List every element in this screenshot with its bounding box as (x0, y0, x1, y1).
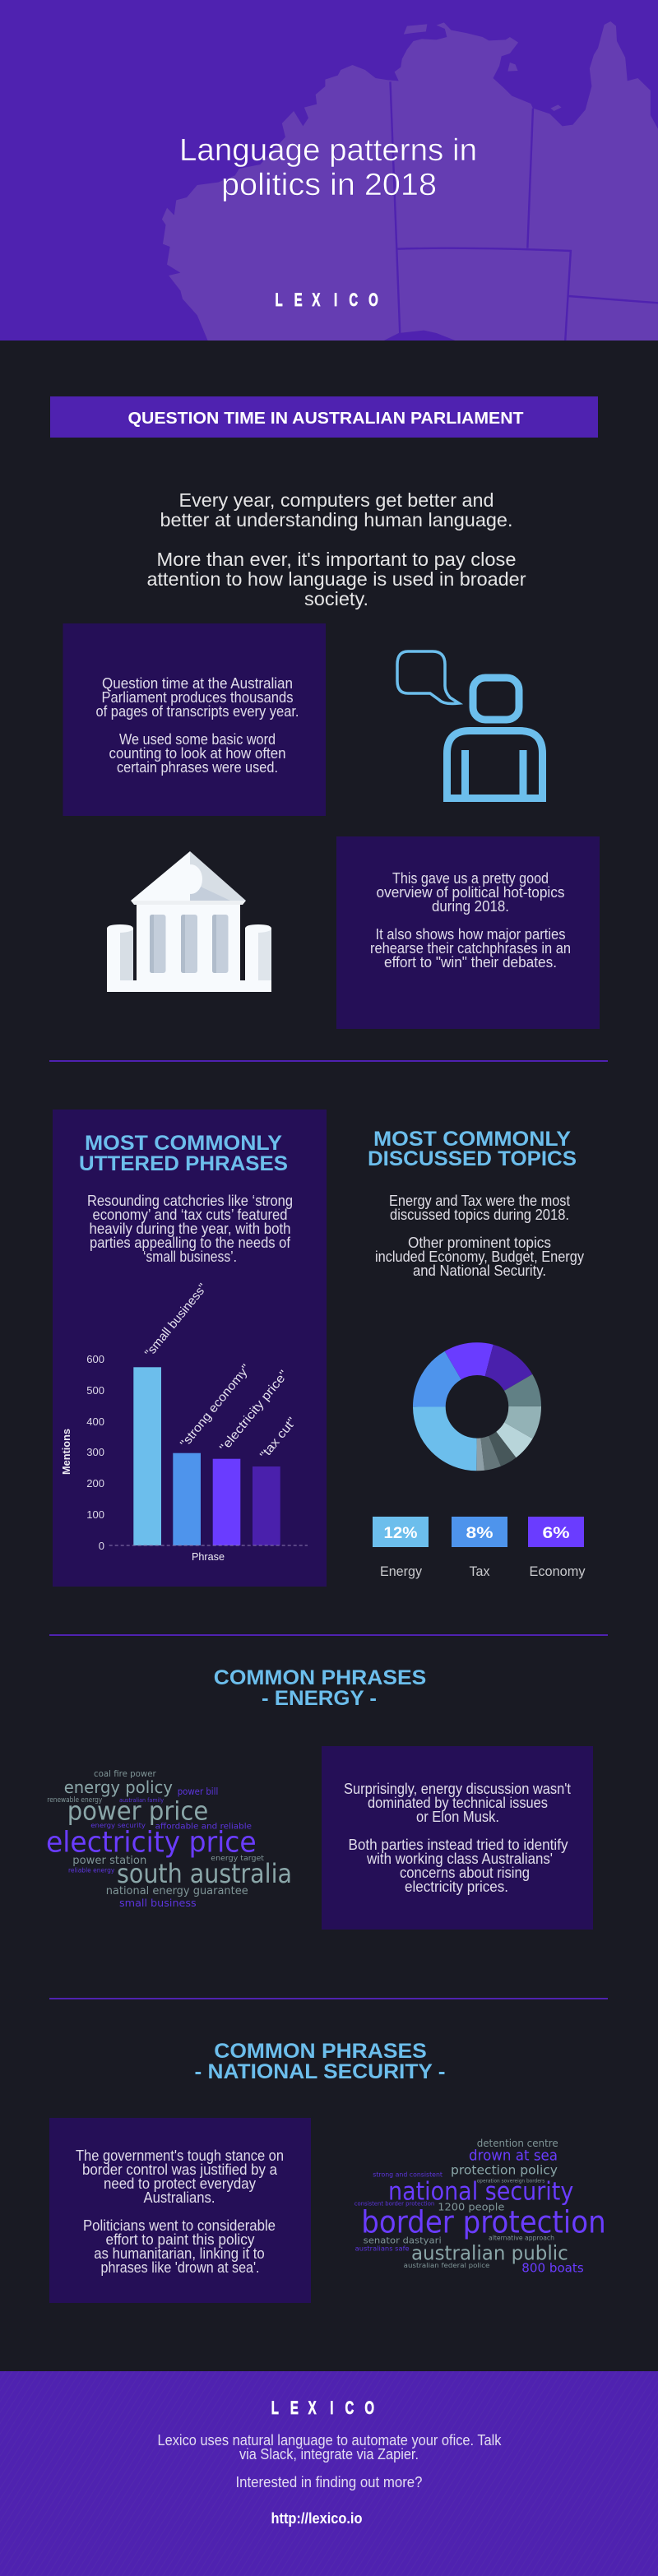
footer text: Interested in finding out more? (235, 2474, 423, 2490)
description: discussed topics during 2018. (390, 1207, 569, 1223)
word cloud: energy: small business (119, 1897, 197, 1909)
panel: energy discussion: or Elon Musk. (416, 1809, 499, 1825)
stat: economy (528, 1517, 586, 1579)
stat: energy (373, 1517, 429, 1579)
heading (79, 1132, 288, 1175)
y axis labels: 600 (86, 1353, 104, 1365)
word cloud: national security: australian public (411, 2242, 568, 2265)
main hall (137, 905, 240, 980)
intro text: More than ever, it's important to pay close (156, 549, 517, 570)
description: Energy and Tax were the most (389, 1193, 570, 1209)
bar: tax cut (253, 1466, 280, 1545)
heading: common phrases national security: COMMON PHRASES (214, 2040, 427, 2063)
section banner: question time (50, 396, 598, 438)
y axis labels: 200 (86, 1477, 104, 1490)
panel: national security discussion: Australians. (143, 2189, 215, 2206)
word cloud: national security: 800 boats (521, 2260, 584, 2275)
stat: energy: Energy (380, 1564, 422, 1579)
stat: tax: Tax (469, 1564, 490, 1579)
word cloud: national security (354, 2137, 606, 2275)
word cloud: national security: drown at sea (469, 2148, 558, 2165)
heading (368, 1128, 577, 1170)
panel: national security discussion: The government's tough stance on (76, 2147, 284, 2164)
panel: energy discussion: concerns about rising (400, 1865, 530, 1881)
word cloud: energy: power station (72, 1855, 146, 1867)
description: parties appealling to the needs of (90, 1235, 291, 1251)
panel: most commonly uttered phrases (53, 1110, 327, 1587)
title (179, 133, 477, 202)
description: included Economy, Budget, Energy (375, 1249, 584, 1265)
panel: political hot-topics overview: rehearse their catchphrases in an (370, 940, 571, 957)
word cloud: national security: border protection (361, 2204, 606, 2240)
title: politics in 2018 (221, 168, 437, 202)
section banner: question time: QUESTION TIME IN AUSTRALIAN PARLIAMENT (128, 410, 523, 428)
description: Other prominent topics (408, 1235, 551, 1251)
word cloud: energy: energy security (90, 1822, 146, 1829)
panel: question time transcripts: We used some basic word (119, 731, 276, 748)
y axis labels: 100 (86, 1508, 104, 1521)
word cloud: national security: 1200 people (438, 2201, 505, 2213)
heading: MOST COMMONLY (85, 1132, 282, 1155)
intro text: attention to how language is used in broader (146, 568, 526, 590)
heading: common phrases energy (214, 1666, 426, 1710)
word cloud: energy: affordable and reliable (155, 1823, 252, 1832)
stat: tax: 8% (466, 1525, 494, 1542)
side columns (107, 924, 271, 980)
panel: political hot-topics overview: overview of political hot-topics (377, 884, 564, 901)
word cloud: national security: strong and consistent (373, 2171, 443, 2179)
stat: tax (452, 1517, 507, 1579)
hall columns (150, 915, 229, 973)
panel: political hot-topics overview: This gave us a pretty good (392, 870, 549, 887)
word cloud: national security: australian federal police (404, 2262, 489, 2269)
panel: energy discussion: Both parties instead tried to identify (349, 1837, 568, 1853)
word cloud: energy (46, 1768, 292, 1909)
panel: most commonly discussed topics (368, 1128, 586, 1579)
base (107, 980, 271, 992)
icon: parliament building (107, 851, 271, 992)
y axis labels: 500 (86, 1384, 104, 1397)
bar labels (142, 1281, 299, 1462)
map of Australia (162, 21, 658, 341)
panel: political hot-topics overview (336, 836, 600, 1029)
panel: energy discussion: with working class Australians' (366, 1851, 553, 1867)
word cloud: energy: reliable energy (68, 1866, 115, 1874)
panel: national security discussion: Politicians went to considerable (83, 2217, 276, 2234)
description: and National Security. (413, 1263, 546, 1279)
bar labels: "small business" (142, 1281, 210, 1360)
heading: common phrases energy: - ENERGY - (262, 1687, 377, 1710)
panel: political hot-topics overview: It also shows how major parties (375, 926, 566, 943)
y axis labels: 0 (99, 1540, 104, 1552)
icon: speech bubble (397, 651, 459, 704)
bar: strong economy (173, 1453, 201, 1545)
intro text (146, 489, 526, 609)
footer text: via Slack, integrate via Zapier. (239, 2446, 419, 2462)
word cloud: national security: protection policy (451, 2162, 558, 2177)
footer text (158, 2432, 502, 2490)
donut chart (429, 1359, 525, 1454)
heading: common phrases energy: COMMON PHRASES (214, 1666, 426, 1689)
description (87, 1193, 293, 1265)
bar labels: "strong economy" (178, 1362, 253, 1451)
word cloud: national security: detention centre (477, 2137, 558, 2149)
description: economy’ and ‘tax cuts’ featured (92, 1207, 288, 1223)
word cloud: energy: renewable energy (47, 1796, 102, 1805)
word cloud: energy: energy target (211, 1855, 264, 1863)
description (375, 1193, 584, 1279)
panel: question time transcripts: Question time at the Australian (102, 675, 293, 692)
word cloud: national security: operation sovereign borders (477, 2179, 544, 2185)
panel: question time transcripts: Parliament produces thousands (102, 689, 293, 706)
footer logo: LEXICO (271, 2398, 374, 2418)
word cloud: national security: australians safe (355, 2245, 410, 2252)
panel: question time transcripts: counting to look at how often (109, 745, 286, 762)
stat: economy: 6% (543, 1525, 570, 1542)
roof (131, 851, 246, 905)
bar: small business (133, 1367, 161, 1545)
word cloud: energy: coal fire power (94, 1768, 156, 1779)
footer (0, 2371, 658, 2576)
panel: question time transcripts: of pages of transcripts every year. (95, 703, 299, 720)
bar labels: "electricity price" (217, 1368, 291, 1455)
bar labels: "tax cut" (257, 1415, 299, 1462)
description: ‘small business’. (143, 1249, 237, 1265)
word cloud: national security: consistent border protection (354, 2201, 434, 2208)
x axis title: Phrase (192, 1550, 225, 1563)
y axis labels (86, 1353, 104, 1552)
word cloud: energy: national energy guarantee (106, 1885, 248, 1897)
panel: question time transcripts (63, 623, 326, 816)
panel: energy discussion (322, 1746, 593, 1930)
panel: national security discussion: border control was justified by a (82, 2161, 278, 2178)
panel: national security discussion (49, 2118, 311, 2303)
word cloud: energy: power price (67, 1797, 208, 1827)
description: Resounding catchcries like ‘strong (87, 1193, 293, 1209)
word cloud: energy: electricity price (46, 1827, 257, 1860)
word cloud: national security: senator dastyari (364, 2235, 442, 2246)
word cloud: energy: australian family (119, 1797, 164, 1804)
heading: common phrases national security: - NATIONAL SECURITY - (194, 2060, 446, 2083)
word cloud: energy: south australia (117, 1858, 292, 1889)
panel: national security discussion: need to protect everyday (104, 2175, 256, 2192)
panel: national security discussion: effort to paint this policy (105, 2231, 255, 2248)
panel: political hot-topics overview: effort to "win" their debates. (384, 954, 557, 971)
hero banner (0, 0, 658, 341)
bar: electricity price (213, 1459, 240, 1545)
panel: national security discussion: phrases like 'drown at sea'. (100, 2259, 260, 2276)
footer link: http://lexico.io (271, 2510, 362, 2527)
bar chart (60, 1281, 308, 1563)
footer text: Lexico uses natural language to automate your ofice. Talk (158, 2432, 502, 2449)
stat: economy: Economy (530, 1564, 586, 1579)
icon: person speaking (397, 651, 543, 798)
y axis labels: 400 (86, 1415, 104, 1428)
panel: question time transcripts: certain phrases were used. (117, 759, 278, 776)
panel: energy discussion: Surprisingly, energy discussion wasn't (344, 1781, 571, 1797)
panel: national security discussion: as humanitarian, linking it to (94, 2245, 265, 2262)
heading: UTTERED PHRASES (79, 1152, 288, 1175)
intro text: society. (304, 588, 368, 609)
heading: DISCUSSED TOPICS (368, 1147, 577, 1170)
heading: common phrases national security (194, 2040, 446, 2083)
logo: LEXICO (276, 290, 378, 310)
y axis labels: 300 (86, 1446, 104, 1458)
intro text: better at understanding human language. (160, 509, 513, 530)
icon: head (473, 678, 519, 720)
panel: political hot-topics overview: during 2018. (432, 898, 509, 915)
panel: energy discussion: electricity prices. (405, 1879, 508, 1895)
title: Language patterns in (179, 133, 477, 168)
stat: energy: 12% (383, 1525, 418, 1542)
word cloud: energy: energy policy (64, 1777, 173, 1797)
description: heavily during the year, with both (89, 1221, 291, 1237)
panel: energy discussion: dominated by technical issues (368, 1795, 548, 1811)
y axis title: Mentions (60, 1429, 72, 1475)
word cloud: energy: power bill (178, 1786, 218, 1797)
intro text: Every year, computers get better and (179, 489, 494, 511)
word cloud: national security: national security (388, 2177, 573, 2206)
heading: MOST COMMONLY (373, 1128, 571, 1151)
word cloud: national security: alternative approach (489, 2235, 554, 2242)
icon: body (447, 730, 543, 798)
